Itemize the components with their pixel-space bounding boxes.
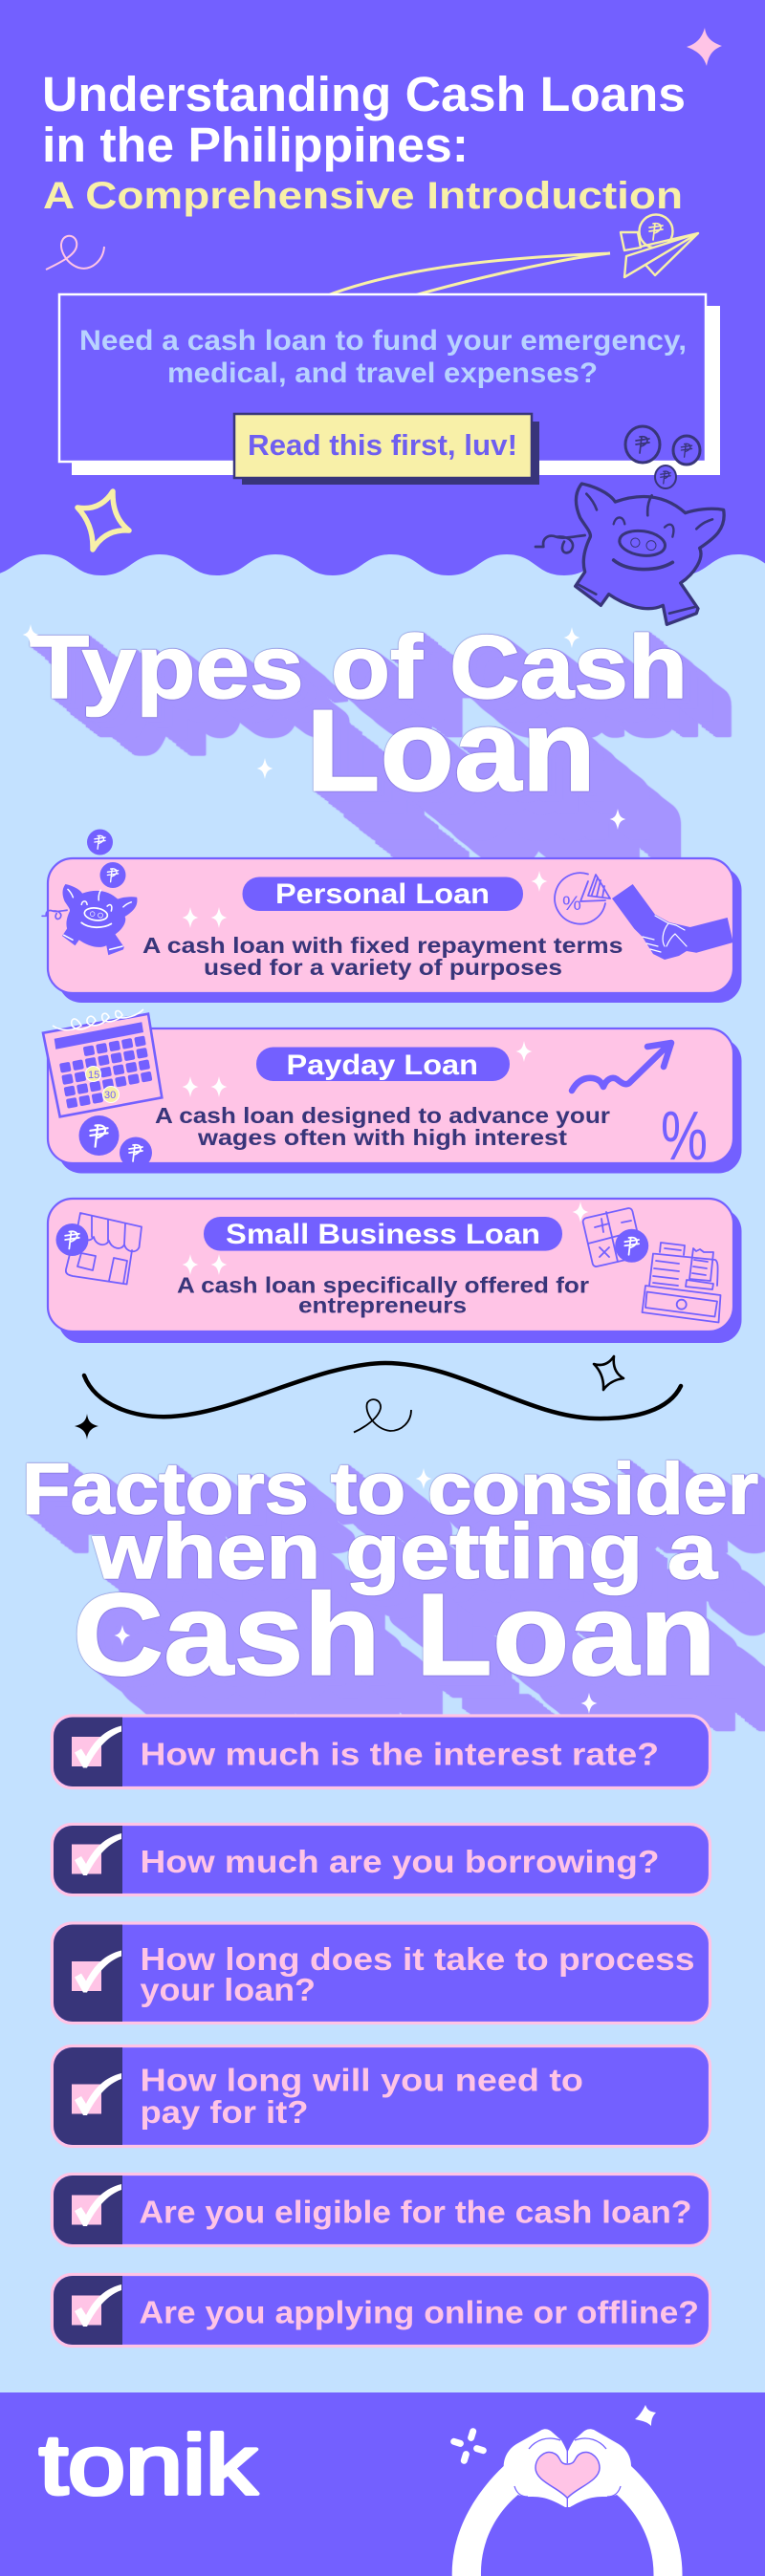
icon: rising arrow bbox=[572, 1043, 671, 1091]
item: repayment time bbox=[52, 2046, 710, 2147]
divider: black wavy line bbox=[84, 1363, 681, 1418]
item: online or offline bbox=[52, 2275, 710, 2346]
description: wages often with high interest bbox=[197, 1125, 567, 1150]
icon: handshake bbox=[612, 884, 733, 960]
heading line 2: Loan bbox=[306, 685, 596, 815]
description: A cash loan with fixed repayment terms bbox=[142, 933, 623, 958]
icon: pink sparkle bbox=[687, 28, 722, 66]
icon: small piggy bank bbox=[42, 884, 137, 955]
description: entrepreneurs bbox=[298, 1292, 467, 1317]
heading line 3: Cash Loan bbox=[73, 1569, 716, 1699]
icon: yellow outlined star bbox=[77, 491, 129, 550]
icon: pie chart with percent: % bbox=[562, 893, 581, 915]
item: eligibility bbox=[52, 2174, 710, 2246]
item: interest rate bbox=[52, 1716, 710, 1787]
sparkles bbox=[182, 1201, 589, 1275]
description: A cash loan specifically offered for bbox=[177, 1273, 589, 1298]
description: A cash loan designed to advance your bbox=[155, 1103, 610, 1128]
heading: types of cash loan bbox=[30, 617, 688, 815]
footer band bbox=[0, 2392, 765, 2576]
heading sparkles bbox=[23, 624, 625, 830]
pill heading: Small Business Loan bbox=[226, 1219, 540, 1250]
icon: coin bbox=[55, 1223, 88, 1256]
icon: black sparkle bbox=[75, 1414, 98, 1440]
panel: payday loan bbox=[43, 1009, 742, 1175]
sparkles bbox=[182, 1041, 532, 1097]
description: used for a variety of purposes bbox=[204, 955, 562, 980]
panel: personal loan bbox=[42, 830, 741, 1003]
item: online or offline: Are you applying online or offline? bbox=[140, 2294, 699, 2330]
icon: paper plane with coin bbox=[621, 214, 698, 277]
header panel with wavy bottom edge bbox=[0, 0, 765, 575]
icon: large piggy bank bbox=[536, 484, 724, 624]
icon: coins bbox=[78, 1115, 152, 1168]
button: read this first: Read this first, luv! bbox=[248, 428, 517, 462]
callout box with white offset shadow bbox=[59, 294, 720, 475]
item: eligibility: Are you eligible for the cash loan? bbox=[140, 2195, 692, 2229]
item: borrowing bbox=[52, 1824, 710, 1894]
heading: factors to consider bbox=[22, 1449, 758, 1699]
icon: coins bbox=[87, 830, 126, 888]
heart bbox=[536, 2452, 600, 2499]
pill heading bbox=[243, 877, 523, 911]
title line 2: in the Philippines: bbox=[42, 118, 469, 172]
item: processing time: How long does it take to process bbox=[140, 1941, 694, 1977]
icon: paper plane trail bbox=[325, 253, 610, 296]
icon: pie chart with percent bbox=[555, 873, 610, 924]
pill heading: Payday Loan bbox=[287, 1050, 478, 1081]
callout box with white offset shadow: medical, and travel expenses? bbox=[167, 357, 598, 389]
description bbox=[177, 1273, 589, 1317]
icon: calendar: 15 bbox=[88, 1070, 99, 1081]
icon: white four-petal sparkle bbox=[449, 2427, 488, 2465]
item: repayment time: How long will you need to bbox=[140, 2063, 583, 2097]
heading line 2: when getting a bbox=[92, 1508, 719, 1595]
icon: calendar: 30 bbox=[104, 1090, 116, 1101]
checklist bbox=[52, 1716, 710, 2346]
item: repayment time: pay for it? bbox=[140, 2094, 308, 2130]
heading line 1: Factors to consider bbox=[22, 1449, 758, 1529]
description bbox=[155, 1103, 610, 1150]
heading line 1: Types of Cash bbox=[30, 617, 688, 717]
description bbox=[142, 933, 623, 980]
item: borrowing: How much are you borrowing? bbox=[140, 1844, 660, 1879]
pill heading: Personal Loan bbox=[275, 878, 490, 910]
sparkles bbox=[182, 871, 547, 928]
panel: small business loan bbox=[48, 1199, 742, 1343]
button: read this first bbox=[234, 414, 539, 485]
icon: heart hands bbox=[452, 2429, 683, 2576]
item: processing time bbox=[52, 1923, 710, 2023]
item: interest rate: How much is the interest rate? bbox=[140, 1736, 659, 1772]
title bbox=[42, 67, 686, 217]
icon: black swirl bbox=[354, 1399, 411, 1432]
heading sparkles bbox=[115, 1468, 597, 1714]
pill heading bbox=[256, 1048, 510, 1081]
icon: store bbox=[66, 1213, 142, 1285]
icon: black outlined star bbox=[594, 1356, 623, 1390]
subtitle: A Comprehensive Introduction bbox=[43, 175, 683, 217]
icon: calculator bbox=[582, 1207, 648, 1267]
icon: pink swirl bbox=[46, 236, 104, 270]
logo: tonik: tonik bbox=[39, 2417, 258, 2512]
callout text: Need a cash loan to fund your emergency, bbox=[79, 325, 687, 357]
icon: falling coins bbox=[625, 426, 700, 488]
icon: calendar bbox=[43, 1009, 162, 1116]
icon: percent: % bbox=[661, 1098, 708, 1175]
item: processing time: your loan? bbox=[140, 1972, 316, 2007]
title line 1: Understanding Cash Loans bbox=[42, 67, 686, 121]
icon: white star bbox=[635, 2405, 656, 2426]
icon: cash register bbox=[643, 1243, 721, 1323]
